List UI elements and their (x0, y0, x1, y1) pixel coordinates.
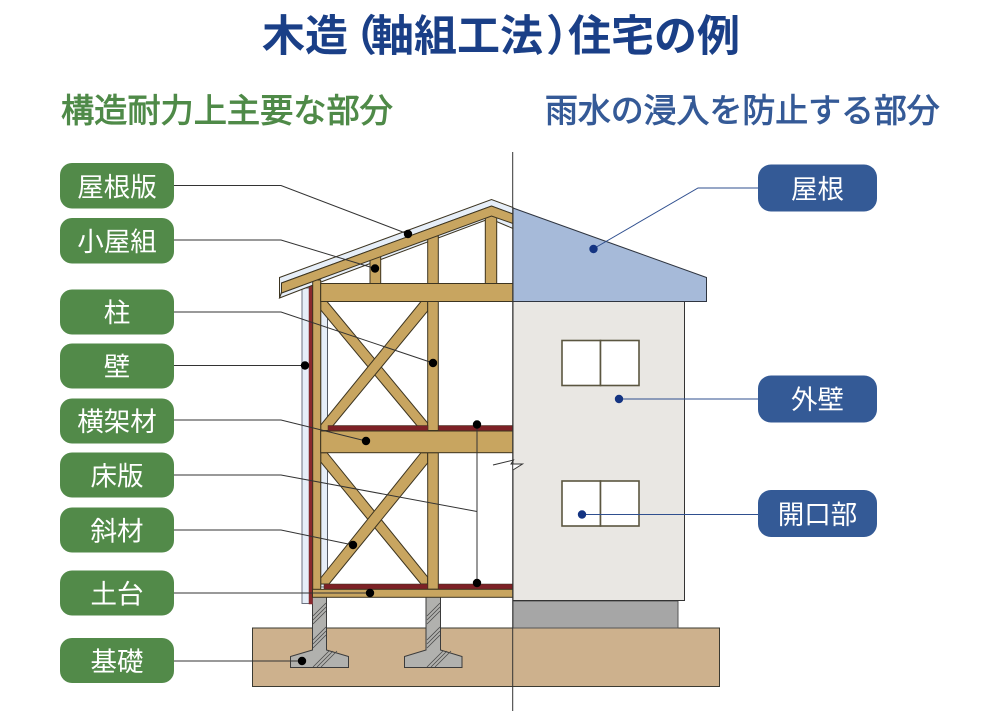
illustration: exterior house (513, 208, 706, 628)
title: ） (546, 2, 589, 64)
label: 床版: 床版 (90, 462, 144, 492)
brace lower 2 (321, 453, 428, 584)
wall sheathing (302, 288, 312, 604)
label: 床版 (60, 452, 174, 498)
title (262, 2, 740, 64)
posts (370, 257, 381, 284)
label: 壁 (60, 344, 174, 388)
lower window (562, 481, 639, 526)
title: 木造 (262, 2, 348, 64)
red floor board lower (324, 584, 428, 589)
label: 柱 (60, 290, 174, 334)
exterior wall (513, 302, 684, 600)
label: 開口部 (758, 490, 877, 537)
roof sheathing (280, 200, 513, 298)
roof rafter (282, 206, 513, 293)
label: 開口部: 開口部 (778, 500, 857, 530)
center divider line (512, 152, 514, 711)
exterior roof (513, 208, 706, 302)
title: 住宅の例 (568, 2, 740, 64)
label: 土台 (60, 570, 174, 616)
illustration: timber frame (280, 200, 513, 604)
illustration: concrete foundations (290, 597, 462, 668)
brace upper 1 (321, 302, 428, 430)
leader dots: structure (298, 230, 481, 665)
label: 屋根版 (60, 163, 174, 208)
leader dots: rain (578, 245, 623, 519)
label: 基礎 (60, 638, 174, 683)
label: 屋根版: 屋根版 (77, 172, 157, 202)
leader lines: rain (582, 188, 758, 514)
title: 軸組工法 (371, 2, 543, 64)
heading: rainwater parts: 雨水の浸入を防止する部分 (545, 92, 940, 129)
label: 壁: 壁 (104, 352, 130, 382)
brace lower 1 (321, 453, 428, 584)
red floor board upper (328, 426, 428, 431)
label: 斜材: 斜材 (90, 516, 144, 546)
label: 小屋組: 小屋組 (77, 227, 157, 257)
label: 柱: 柱 (104, 298, 130, 328)
upper window (562, 340, 639, 386)
heading: structural parts: 構造耐力上主要な部分 (61, 93, 393, 130)
label: 土台: 土台 (90, 580, 144, 610)
illustration: ground (252, 628, 720, 686)
label: 外壁 (758, 376, 877, 422)
brace upper 2 (321, 302, 428, 430)
illustration: cut-away white area break mark (493, 460, 522, 480)
upper beam (321, 284, 513, 302)
label: 屋根 (758, 164, 877, 212)
label: 横架材: 横架材 (77, 407, 157, 437)
label: 屋根: 屋根 (791, 174, 844, 204)
exterior foundation (513, 601, 678, 628)
label: 横架材 (60, 398, 174, 444)
label: 外壁: 外壁 (791, 385, 844, 415)
label: 斜材 (60, 508, 174, 552)
label: 小屋組 (60, 218, 174, 264)
leader lines: structure (174, 186, 477, 661)
label: 基礎: 基礎 (90, 647, 144, 677)
sill (312, 589, 513, 597)
title: （ (334, 2, 377, 64)
mid beam (321, 431, 513, 453)
